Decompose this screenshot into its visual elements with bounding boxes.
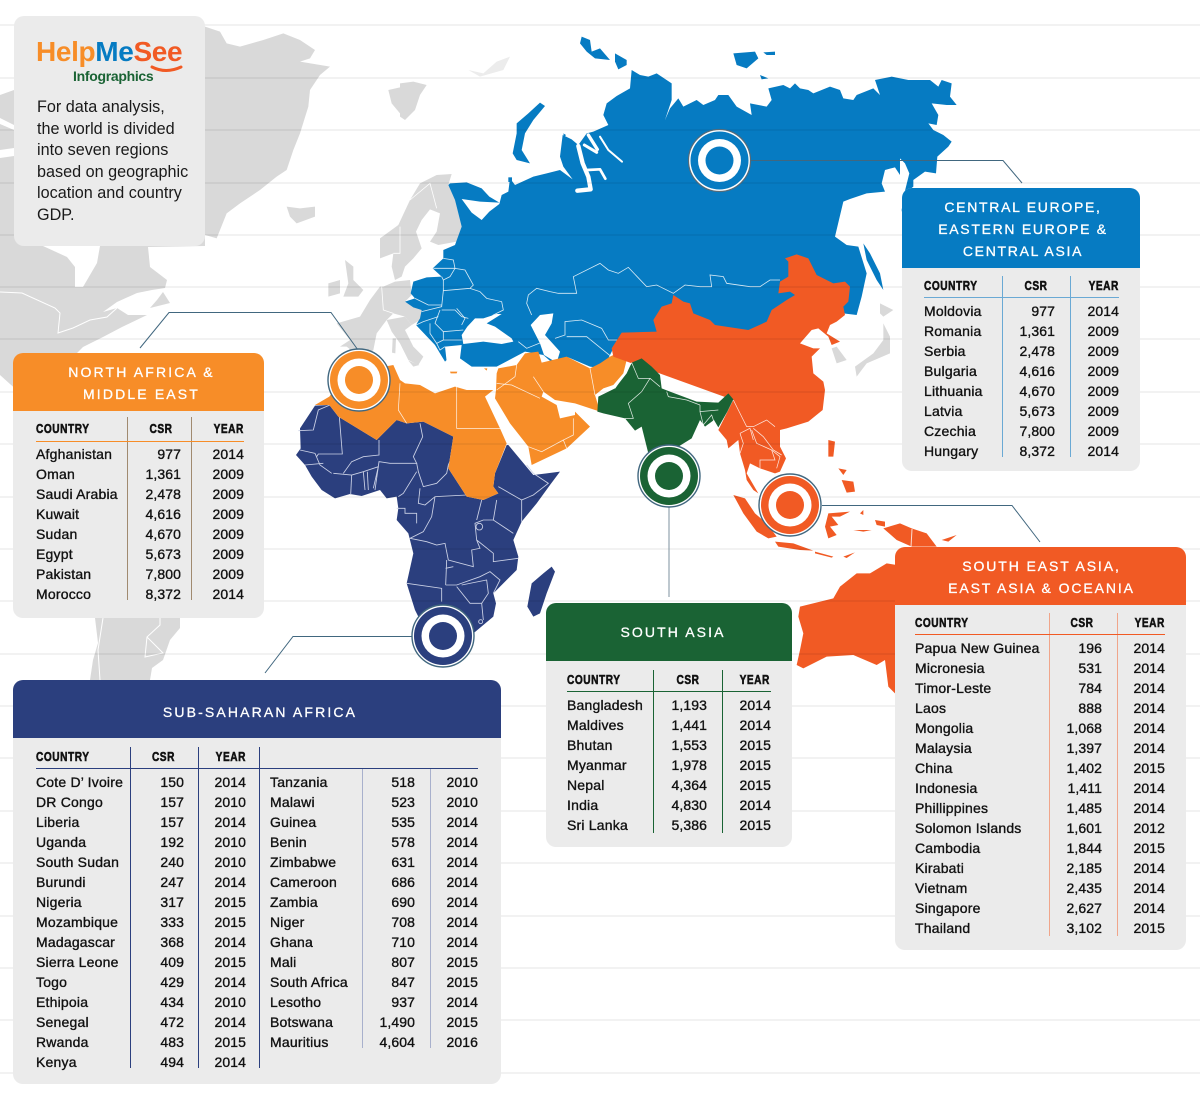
table: data rows, first column set: 429 [160, 974, 184, 990]
table: data rows: Lithuania [924, 383, 983, 399]
table: data rows, first column set: 2014 [214, 1054, 246, 1070]
map: South Asia region [597, 358, 733, 473]
table: data rows: 7,800 [1019, 423, 1055, 439]
table: data rows: 1,844 [1066, 840, 1102, 856]
heading: EAST ASIA & OCEANIA [948, 580, 1135, 596]
leader line: Sub-Saharan Africa [265, 636, 412, 673]
table: data rows: 4,364 [671, 777, 707, 793]
panel: Central Europe, Eastern Europe and Central Asia [902, 188, 1140, 471]
table: header row: CSR [1025, 278, 1048, 293]
table: data rows, first column set: 192 [160, 834, 184, 850]
table: data rows, first column set: 2010 [214, 854, 246, 870]
table: data rows, second column set: South Africa [270, 974, 348, 990]
table: data rows, second column set: Tanzania [270, 774, 328, 790]
table: data rows, second column set: Benin [270, 834, 307, 850]
table: data rows: 1,978 [671, 757, 707, 773]
table: data rows: Latvia [924, 403, 963, 419]
table: data rows: 2014 [212, 586, 244, 602]
heading: MIDDLE EAST [83, 386, 200, 402]
table: data rows, first column set [36, 774, 246, 1070]
table: data rows, first column set: 494 [160, 1054, 184, 1070]
table: data rows: 5,673 [1019, 403, 1055, 419]
heading [938, 199, 1108, 259]
table: data rows: Micronesia [915, 660, 985, 676]
map: white country borders, blue region [415, 258, 780, 358]
table: data rows: China [915, 760, 953, 776]
heading: CENTRAL EUROPE, [944, 199, 1102, 215]
map: white country borders, South East Asia [733, 400, 782, 468]
table: header row [567, 672, 770, 687]
map: grey rest of world [0, 27, 893, 680]
table: data rows, second column set: 710 [391, 934, 415, 950]
table: data rows, first column set: Ethipoia [36, 994, 88, 1010]
table: data rows: 5,386 [671, 817, 707, 833]
table: header row: CSR [677, 672, 700, 687]
table: data rows, second column set: 937 [391, 994, 415, 1010]
table: data rows: 2014 [1133, 900, 1165, 916]
panel header [13, 680, 501, 738]
table: header row: YEAR [216, 749, 246, 764]
table: data rows: 2015 [739, 737, 771, 753]
table: data rows: 2014 [1133, 880, 1165, 896]
table: data rows: Mongolia [915, 720, 973, 736]
table: data rows, second column set: 2014 [446, 894, 478, 910]
table: data rows: Laos [915, 700, 946, 716]
intro text: the world is divided [37, 120, 175, 138]
logo: Infographics [73, 68, 153, 84]
table: data rows, first column set: Togo [36, 974, 67, 990]
map: Central Europe, Eastern Europe and Central Asia region [405, 37, 957, 368]
table: data rows, first column set: 317 [160, 894, 184, 910]
table: data rows: 1,361 [1019, 323, 1055, 339]
logo [36, 36, 183, 84]
table: data rows, second column set: 631 [391, 854, 415, 870]
table: data rows, second column set: Zambia [270, 894, 318, 910]
table: data rows, second column set: Guinea [270, 814, 316, 830]
table: data rows: Oman [36, 466, 75, 482]
leader line: North Africa [140, 312, 358, 350]
table: data rows, second column set: 2015 [446, 954, 478, 970]
table: data rows, first column set: 2014 [214, 974, 246, 990]
table: data rows: 1,193 [671, 697, 707, 713]
table: data rows: Myanmar [567, 757, 627, 773]
table: header row: CSR [152, 749, 175, 764]
table: data rows, first column set: 157 [160, 814, 184, 830]
table: header row: CSR [1071, 615, 1094, 630]
map: white country borders, Africa [298, 405, 548, 624]
table: data rows [567, 697, 771, 833]
table: data rows: Pakistan [36, 566, 91, 582]
table: data rows, second column set: 1,490 [379, 1014, 415, 1030]
table: data rows, second column set: 690 [391, 894, 415, 910]
heading: CENTRAL ASIA [963, 243, 1083, 259]
table: data rows, second column set: Zimbabwe [270, 854, 336, 870]
table: data rows: 2009 [1087, 343, 1119, 359]
table: header row [915, 615, 1165, 630]
table: data rows, second column set: 2015 [446, 1014, 478, 1030]
table: data rows: 784 [1078, 680, 1102, 696]
marker: North Africa [328, 349, 390, 411]
panel: Sub-Saharan Africa [13, 680, 501, 1084]
map: Arctic gulfs [577, 135, 622, 191]
table: data rows, second column set: Botswana [270, 1014, 333, 1030]
heading: SOUTH EAST ASIA, [962, 558, 1121, 574]
table: data rows, second column set: 807 [391, 954, 415, 970]
table: header row: COUNTRY [36, 749, 90, 764]
leader line: South Asia [668, 507, 670, 597]
table: header row: YEAR [740, 672, 770, 687]
table: data rows: Singapore [915, 900, 981, 916]
table: data rows, first column set: DR Congo [36, 794, 103, 810]
table: data rows: 2014 [1133, 860, 1165, 876]
table: data rows: 2009 [1087, 323, 1119, 339]
marker: Sub-Saharan Africa [412, 605, 474, 667]
map: South East Asia, East Asia and Oceania region [612, 254, 957, 693]
table: data rows: 2014 [212, 446, 244, 462]
table: data rows, first column set: 2015 [214, 1034, 246, 1050]
table: data rows: 2,478 [145, 486, 181, 502]
table: data rows, first column set: Madagascar [36, 934, 115, 950]
table: data rows: 8,372 [145, 586, 181, 602]
table: data rows: 2014 [1087, 443, 1119, 459]
heading: SOUTH ASIA [620, 624, 726, 640]
table: data rows: 2,478 [1019, 343, 1055, 359]
marker: South Asia [638, 445, 700, 507]
table: data rows: 1,361 [145, 466, 181, 482]
table: data rows: Moldovia [924, 303, 982, 319]
table: data rows: 3,102 [1066, 920, 1102, 936]
panel: North Africa and Middle East [13, 353, 264, 618]
table: header row: YEAR [214, 421, 244, 436]
map: white sliver seas [0, 118, 100, 287]
table: data rows, first column set: 2010 [214, 994, 246, 1010]
table: data rows: 1,553 [671, 737, 707, 753]
table: data rows, second column set: 847 [391, 974, 415, 990]
table: data rows: 1,068 [1066, 720, 1102, 736]
panel: South East Asia, East Asia and Oceania [895, 547, 1186, 950]
table: data rows: 1,601 [1066, 820, 1102, 836]
table: data rows: Czechia [924, 423, 976, 439]
table: data rows: 977 [157, 446, 181, 462]
table: data rows: Thailand [915, 920, 970, 936]
table: data rows: Egypt [36, 546, 73, 562]
table: data rows: Nepal [567, 777, 605, 793]
table: data rows: 2009 [212, 506, 244, 522]
table: data rows: Papua New Guinea [915, 640, 1040, 656]
table: data rows, second column set: 2014 [446, 874, 478, 890]
map: North Africa and Middle East region [315, 352, 627, 500]
table: data rows, first column set: Sierra Leone [36, 954, 119, 970]
panel header [546, 603, 792, 661]
table: data rows: India [567, 797, 598, 813]
heading [948, 558, 1135, 596]
table: data rows: Morocco [36, 586, 91, 602]
table: header row: YEAR [1135, 615, 1165, 630]
table: data rows, second column set: 2016 [446, 1034, 478, 1050]
table: data rows: 2014 [1133, 660, 1165, 676]
table: data rows: 2014 [1087, 303, 1119, 319]
table: data rows: 2009 [212, 466, 244, 482]
map: white lines on grey [0, 183, 437, 680]
table: data rows, second column set: 2014 [446, 854, 478, 870]
table: data rows, first column set: 2014 [214, 814, 246, 830]
table: data rows, first column set: 150 [160, 774, 184, 790]
heading: SUB-SAHARAN AFRICA [163, 704, 357, 720]
table: data rows: Afghanistan [36, 446, 112, 462]
leader line: South East Asia [822, 506, 1040, 542]
table: data rows, first column set: 434 [160, 994, 184, 1010]
table: header row [924, 278, 1119, 293]
table: data rows, first column set: Nigeria [36, 894, 82, 910]
table: data rows: 2009 [212, 546, 244, 562]
table: data rows, first column set: 157 [160, 794, 184, 810]
table: data rows: 8,372 [1019, 443, 1055, 459]
table: data rows, first column set: Uganda [36, 834, 86, 850]
table: data rows: 2009 [1087, 383, 1119, 399]
table: data rows: 2014 [1133, 720, 1165, 736]
table: data rows [914, 640, 1165, 936]
table: data rows, second column set: 2015 [446, 974, 478, 990]
table: data rows, first column set: 2014 [214, 874, 246, 890]
table: header row: YEAR [1089, 278, 1119, 293]
table: data rows: 4,830 [671, 797, 707, 813]
table: data rows: 2014 [739, 717, 771, 733]
table: data rows: Bangladesh [567, 697, 643, 713]
intro text: based on geographic [37, 162, 188, 180]
table: data rows: Sri Lanka [567, 817, 628, 833]
table: data rows, first column set: 247 [160, 874, 184, 890]
table: data rows: 1,441 [671, 717, 707, 733]
table: data rows, first column set: Kenya [36, 1054, 77, 1070]
table: data rows, second column set: 2014 [446, 834, 478, 850]
table: data rows: 2009 [212, 526, 244, 542]
panel: intro [14, 16, 205, 246]
table: data rows: 4,616 [1019, 363, 1055, 379]
table: data rows, first column set: 2010 [214, 834, 246, 850]
table: data rows: 2014 [1133, 800, 1165, 816]
table: data rows: Bulgaria [924, 363, 977, 379]
table: data rows: 1,402 [1066, 760, 1102, 776]
table: header row: CSR [150, 421, 173, 436]
table: data rows: 2014 [1133, 700, 1165, 716]
table: data rows: 2009 [1087, 403, 1119, 419]
table: data rows, second column set: 2014 [446, 994, 478, 1010]
table: data rows: Serbia [924, 343, 966, 359]
table: data rows: 2015 [739, 817, 771, 833]
panel: South Asia [546, 603, 792, 847]
table: data rows, second column set: 686 [391, 874, 415, 890]
table: data rows, second column set: 578 [391, 834, 415, 850]
table: header row: COUNTRY [567, 672, 621, 687]
table: data rows, second column set: 2010 [446, 774, 478, 790]
marker: South East Asia [759, 474, 821, 536]
table: data rows, first column set: 483 [160, 1034, 184, 1050]
table: data rows: 888 [1078, 700, 1102, 716]
table: data rows, second column set: 523 [391, 794, 415, 810]
map: Sub-Saharan Africa region [296, 405, 560, 660]
table: data rows: 1,485 [1066, 800, 1102, 816]
intro text: into seven regions [37, 141, 168, 159]
table: data rows: 2014 [739, 797, 771, 813]
table: data rows, first column set: 409 [160, 954, 184, 970]
heading: NORTH AFRICA & [68, 364, 215, 380]
table: data rows: Kuwait [36, 506, 79, 522]
table: data rows, first column set: 2014 [214, 1014, 246, 1030]
table: data rows, second column set: Ghana [270, 934, 313, 950]
table: data rows: 2,435 [1066, 880, 1102, 896]
intro text: For data analysis, [37, 98, 165, 116]
table: data rows, second column set: 2014 [446, 914, 478, 930]
table: data rows, first column set: Liberia [36, 814, 79, 830]
table: header row: COUNTRY [36, 421, 90, 436]
leader line: Central Europe [750, 160, 1022, 183]
table: data rows: 2014 [1133, 680, 1165, 696]
table: data rows: 2,185 [1066, 860, 1102, 876]
table: data rows: 2014 [1133, 780, 1165, 796]
table: data rows: 2015 [739, 757, 771, 773]
logo: HelpMeSee [36, 36, 182, 67]
table: data rows, second column set: Malawi [270, 794, 315, 810]
table: data rows [36, 446, 244, 602]
panel header [13, 353, 264, 411]
table: data rows, second column set: Mali [270, 954, 296, 970]
table: data rows, first column set: 2015 [214, 914, 246, 930]
table: data rows, second column set: 708 [391, 914, 415, 930]
table: data rows, second column set: 535 [391, 814, 415, 830]
table: data rows, second column set: 2014 [446, 814, 478, 830]
heading: EASTERN EUROPE & [938, 221, 1108, 237]
intro text: location and country [37, 184, 182, 202]
table: data rows: Phillippines [915, 800, 988, 816]
table: data rows: Maldives [567, 717, 624, 733]
table: data rows, first column set: Senegal [36, 1014, 89, 1030]
table: data rows, second column set: Mauritius [270, 1034, 329, 1050]
intro text [37, 98, 188, 224]
marker: Central Europe [688, 130, 750, 192]
table: data rows: 2014 [1133, 740, 1165, 756]
table: data rows, first column set: Burundi [36, 874, 86, 890]
heading [68, 364, 215, 402]
table: data rows: 2014 [1133, 640, 1165, 656]
table: data rows: Cambodia [915, 840, 980, 856]
table: data rows, first column set: Rwanda [36, 1034, 89, 1050]
intro text: GDP. [37, 206, 74, 224]
table: data rows: Timor-Leste [915, 680, 991, 696]
table: header row: COUNTRY [924, 278, 978, 293]
table: data rows, first column set: 2014 [214, 934, 246, 950]
table: data rows, first column set: Mozambique [36, 914, 118, 930]
table: data rows, first column set: 2010 [214, 794, 246, 810]
table: data rows, first column set: Cote D’ Ivoire [36, 774, 123, 790]
table: data rows: 5,673 [145, 546, 181, 562]
table: data rows: 2009 [212, 486, 244, 502]
table: data rows: 2012 [1133, 820, 1165, 836]
table: data rows: Hungary [924, 443, 978, 459]
table: data rows: 196 [1078, 640, 1102, 656]
table: data rows: 2015 [1133, 840, 1165, 856]
table: data rows: 4,670 [1019, 383, 1055, 399]
table: data rows: 977 [1031, 303, 1055, 319]
table: data rows, first column set: South Sudan [36, 854, 119, 870]
table: data rows: 531 [1078, 660, 1102, 676]
table: header row: COUNTRY [915, 615, 969, 630]
table: data rows: Indonesia [915, 780, 978, 796]
table: data rows, second column set: Lesotho [270, 994, 321, 1010]
table: data rows, first column set: 240 [160, 854, 184, 870]
table: data rows, second column set [270, 774, 478, 1050]
table: data rows, first column set: 333 [160, 914, 184, 930]
table: data rows: Saudi Arabia [36, 486, 118, 502]
table: data rows: 2009 [1087, 423, 1119, 439]
table: data rows: 7,800 [145, 566, 181, 582]
map: white country borders, North Africa and Middle East [398, 365, 595, 452]
table: data rows: Bhutan [567, 737, 613, 753]
panel header [895, 547, 1186, 605]
table: data rows: 4,616 [145, 506, 181, 522]
table: data rows: Sudan [36, 526, 77, 542]
table: data rows, second column set: 4,604 [379, 1034, 415, 1050]
table: data rows, first column set: 368 [160, 934, 184, 950]
table: data rows, second column set: Niger [270, 914, 304, 930]
table: data rows, first column set: 472 [160, 1014, 184, 1030]
table: data rows: 2015 [739, 777, 771, 793]
map: Black Sea, Aegean and Caspian [445, 313, 560, 363]
table: data rows: 4,670 [145, 526, 181, 542]
table: data rows: 2014 [739, 697, 771, 713]
table: data rows, first column set: 2014 [214, 774, 246, 790]
table: data rows: Vietnam [915, 880, 968, 896]
table: data rows: 2009 [1087, 363, 1119, 379]
table: data rows: 2,627 [1066, 900, 1102, 916]
table: data rows: 2009 [212, 566, 244, 582]
table: data rows: 2015 [1133, 920, 1165, 936]
table: data rows: 1,397 [1066, 740, 1102, 756]
table: header row [36, 421, 244, 436]
table: data rows: Romania [924, 323, 981, 339]
table: data rows: Solomon Islands [915, 820, 1022, 836]
panel header [902, 188, 1140, 268]
table: data rows [924, 303, 1119, 460]
table: data rows, second column set: 518 [391, 774, 415, 790]
table: data rows: Kirabati [915, 860, 964, 876]
table: data rows: Malaysia [915, 740, 972, 756]
table: data rows, second column set: 2014 [446, 934, 478, 950]
table: data rows, first column set: 2015 [214, 894, 246, 910]
table: data rows: 1,411 [1068, 780, 1102, 796]
table: data rows, second column set: Cameroon [270, 874, 337, 890]
table: data rows, second column set: 2010 [446, 794, 478, 810]
table: data rows, first column set: 2015 [214, 954, 246, 970]
table: header row [36, 749, 246, 764]
table: data rows: 2015 [1133, 760, 1165, 776]
